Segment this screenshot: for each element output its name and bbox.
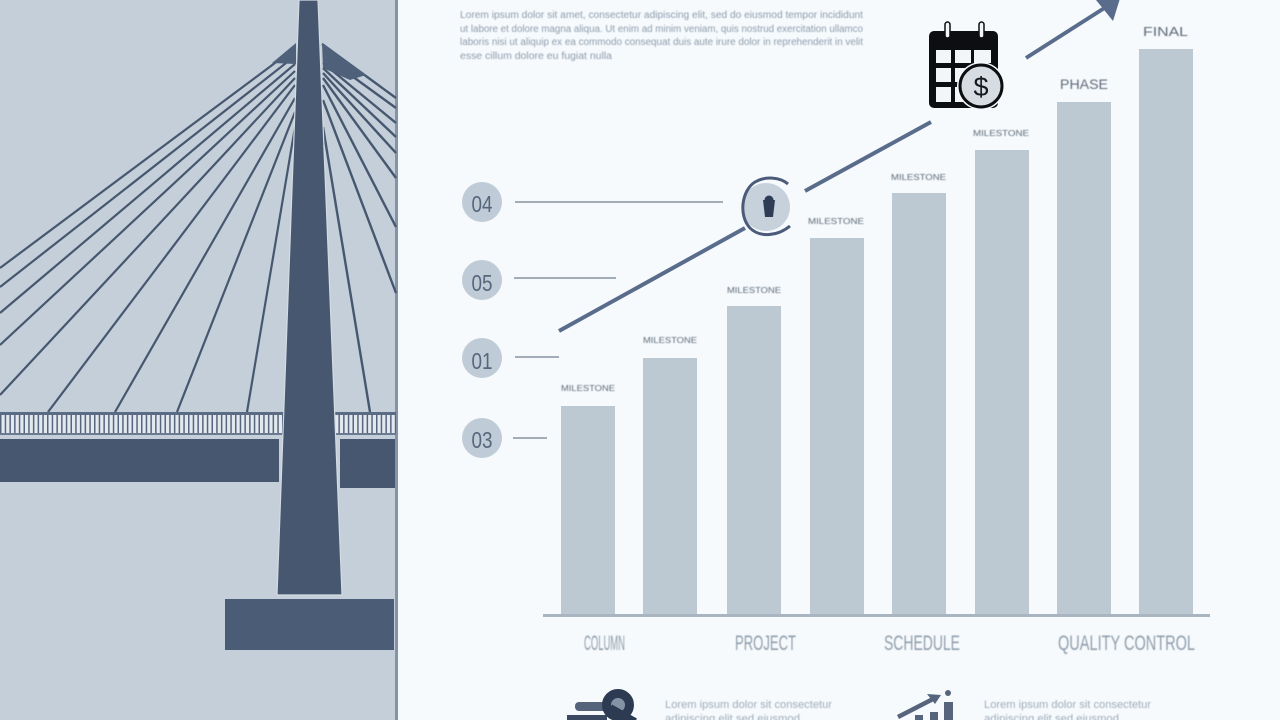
icon: circular marker — [742, 178, 790, 235]
panel: bridge illustration — [0, 0, 398, 720]
intro text block: esse cillum dolore eu fugiat nulla — [460, 51, 612, 62]
icon: wrench and tools — [567, 694, 635, 720]
intro text block — [460, 10, 863, 62]
text block: growth note — [984, 699, 1151, 720]
bridge railing — [0, 412, 396, 435]
step marker 01 — [462, 338, 559, 378]
icon: growth chart — [898, 690, 953, 720]
bar value labels: PHASE — [1060, 76, 1108, 92]
bar value labels: MILESTONE — [561, 384, 615, 393]
step marker 01: 01 — [472, 348, 492, 374]
intro text block: ut labore et dolore magna aliqua. Ut enim ad minim veniam, quis nostrud exercitation ullamco — [460, 24, 863, 35]
bar value labels: FINAL — [1143, 24, 1188, 39]
bar value labels: MILESTONE — [808, 217, 864, 226]
axis labels: COLUMN — [584, 632, 625, 655]
text block: tools note: Lorem ipsum dolor sit consectetur — [665, 699, 832, 711]
bar value labels: MILESTONE — [643, 336, 697, 345]
cable anchor: right — [322, 43, 366, 80]
text block: growth note: Lorem ipsum dolor sit consectetur — [984, 699, 1151, 711]
icon: calendar with dollar coin: $ — [973, 72, 989, 102]
cables: left side — [0, 48, 295, 412]
axis labels: PROJECT — [735, 632, 796, 655]
bar value labels: MILESTONE — [727, 286, 781, 295]
bar value labels: MILESTONE — [973, 129, 1029, 138]
axis labels — [584, 632, 1195, 655]
axis labels: QUALITY CONTROL — [1058, 632, 1195, 655]
bar value labels: MILESTONE — [891, 173, 946, 182]
bar chart — [543, 24, 1210, 617]
chart baseline — [543, 614, 1210, 617]
step marker 04: 04 — [472, 191, 493, 217]
step marker 04 — [462, 182, 723, 222]
step marker 03: 03 — [472, 427, 492, 453]
axis labels: SCHEDULE — [884, 632, 960, 655]
step marker 05 — [462, 260, 616, 300]
tower base — [225, 599, 394, 650]
arrow: rising trend — [559, 0, 1122, 331]
intro text block: Lorem ipsum dolor sit amet, consectetur adipiscing elit, sed do eiusmod tempor incididunt — [460, 10, 863, 21]
icon: calendar with dollar coin — [929, 22, 1005, 110]
cable anchor: left — [272, 43, 296, 64]
bridge tower — [277, 0, 342, 595]
step marker 03 — [462, 418, 547, 458]
cables: right side — [322, 44, 396, 412]
bars — [561, 49, 1193, 615]
bridge deck — [0, 439, 395, 488]
step marker 05: 05 — [472, 270, 492, 296]
bar value labels — [561, 24, 1188, 393]
intro text block: laboris nisi ut aliquip ex ea commodo consequat duis aute irure dolor in reprehenderit in velit — [460, 37, 863, 48]
text block: tools note — [665, 699, 832, 720]
